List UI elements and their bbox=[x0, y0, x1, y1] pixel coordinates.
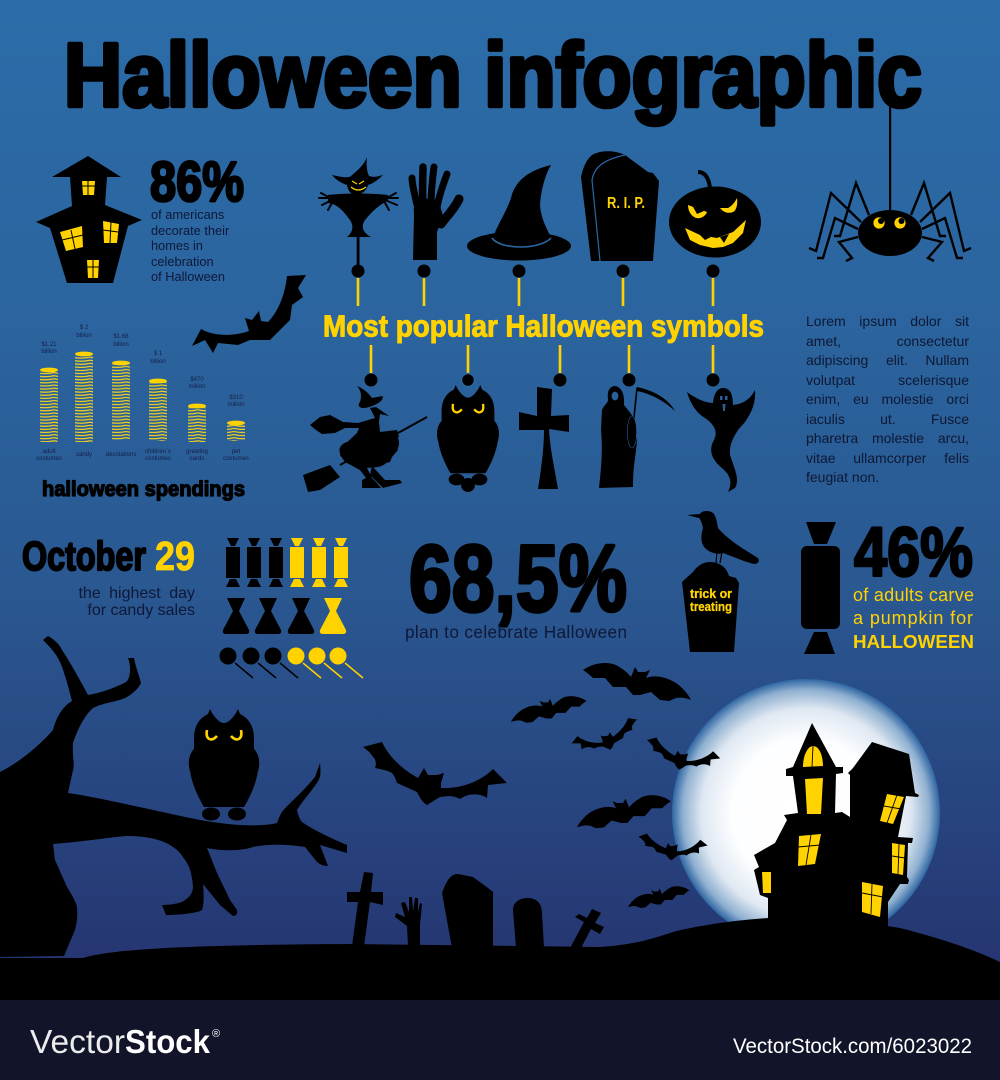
coin stack: greeting cards: cards bbox=[190, 456, 204, 462]
footer logo: Vector bbox=[30, 1023, 125, 1060]
icon: tombstone small bbox=[513, 898, 544, 948]
pictogram: candy bags bbox=[223, 598, 346, 634]
icon: zombie hand small bbox=[395, 897, 422, 946]
coin stack: adult costumes: $1.21 bbox=[41, 342, 57, 348]
stat: October 29: October bbox=[22, 533, 146, 579]
coin stack: adult costumes: adult bbox=[42, 449, 56, 455]
coin stack: candy: billion bbox=[76, 333, 92, 339]
tree with branches bbox=[0, 636, 347, 957]
stat: October 29: 29 bbox=[155, 533, 195, 579]
icon: big candy bbox=[801, 522, 840, 654]
graveyard items bbox=[347, 872, 604, 948]
stat description: of Halloween bbox=[151, 269, 225, 284]
coin stack: pet costumes: pet bbox=[232, 449, 241, 455]
text block: lorem ipsum: iaculis ut. Fusce bbox=[806, 410, 969, 426]
icon: leaning cross bbox=[347, 872, 383, 946]
icon: perched owl bbox=[189, 709, 259, 820]
stat: 46 percent bbox=[853, 513, 974, 652]
coin stack: children's costumes bbox=[145, 351, 171, 462]
stat description: decorate their bbox=[151, 223, 230, 238]
pictogram: lollipops bbox=[220, 648, 363, 678]
coin stack: children's costumes: costumes bbox=[145, 456, 171, 462]
coin stack: pet costumes: million bbox=[227, 402, 245, 408]
text block: lorem ipsum: adipiscing elit. Nullam bbox=[806, 352, 969, 368]
text block: lorem ipsum: volutpat scelerisque bbox=[806, 372, 969, 388]
icon: small haunted house bbox=[36, 156, 142, 283]
icon: owl bbox=[437, 374, 499, 492]
icon: tombstone large bbox=[442, 874, 493, 948]
text block: lorem ipsum: pharetra molestie arcu, bbox=[806, 430, 969, 446]
coin stack: decorations bbox=[106, 334, 136, 458]
text block: lorem ipsum bbox=[806, 313, 969, 485]
coin stack: greeting cards: greeting bbox=[186, 449, 208, 455]
icon: tilted cross bbox=[570, 909, 604, 948]
icon: zombie hand bbox=[412, 167, 459, 260]
coin stack: candy: candy bbox=[76, 452, 92, 458]
stat description: for candy sales bbox=[87, 602, 195, 619]
icon: cross bbox=[519, 387, 569, 489]
coin stack: decorations: billion bbox=[113, 342, 129, 348]
symbols heading: Most popular Halloween symbols bbox=[323, 308, 764, 344]
coin stack: decorations: decotations bbox=[106, 452, 136, 458]
ground hill bbox=[0, 918, 1000, 1000]
stat description: a pumpkin for bbox=[853, 608, 973, 628]
coin stack: adult costumes: billion bbox=[41, 349, 57, 355]
footer bar bbox=[0, 1000, 1000, 1080]
footer logo bbox=[30, 1023, 220, 1060]
icon: flying witch bbox=[303, 386, 427, 492]
coin stack: greeting cards: million bbox=[188, 384, 206, 390]
stat description: the highest day bbox=[78, 585, 195, 602]
connectors: bottom row bbox=[364, 345, 720, 386]
connectors: top row bbox=[352, 264, 720, 306]
icon: crow on trick or treating gravestone: trick or bbox=[690, 586, 732, 601]
stat description: plan to celebrate Halloween bbox=[405, 622, 627, 642]
chart heading: halloween spendings: halloween spendings bbox=[42, 478, 245, 501]
coin stack: greeting cards bbox=[186, 377, 208, 462]
highlight word: HALLOWEEN bbox=[853, 632, 974, 652]
moon bbox=[672, 679, 940, 947]
coin stack: pet costumes bbox=[223, 395, 249, 462]
stat: 68,5 percent: 68,5% bbox=[409, 526, 627, 632]
footer image id: VectorStock.com/6023022 bbox=[733, 1035, 972, 1058]
coin stack: candy: $ 2 bbox=[80, 325, 89, 331]
footer logo: Stock bbox=[125, 1023, 211, 1060]
stat: 46 percent: 46% bbox=[854, 513, 973, 591]
icon: crow on trick or treating gravestone: treating bbox=[690, 599, 732, 614]
icon: witch hat bbox=[467, 165, 571, 260]
stat: 86 percent bbox=[150, 150, 244, 284]
stat description: of americans bbox=[151, 207, 224, 222]
icon: spider bbox=[809, 105, 971, 261]
coin stack: adult costumes bbox=[36, 342, 62, 462]
icon: jack-o-lantern bbox=[669, 172, 761, 258]
text block: lorem ipsum: amet, consectetur bbox=[806, 332, 969, 348]
text block: lorem ipsum: vitae ullamcorper felis bbox=[806, 450, 969, 466]
footer logo: ® bbox=[212, 1028, 220, 1040]
coin stack: greeting cards: $470 bbox=[190, 377, 204, 383]
pictogram: wrapped candies bbox=[226, 538, 348, 587]
stat description: celebration bbox=[151, 254, 214, 269]
haunted house on hill bbox=[754, 723, 919, 930]
coin stack: pet costumes: $310 bbox=[229, 395, 243, 401]
stat description: of adults carve bbox=[853, 585, 974, 605]
icon: crow on trick or treating gravestone bbox=[682, 511, 759, 652]
coin stack: decorations: $1.68 bbox=[113, 334, 129, 340]
coin stack: adult costumes: costumes bbox=[36, 456, 62, 462]
text block: lorem ipsum: Lorem ipsum dolor sit bbox=[806, 313, 969, 329]
title: Halloween infographic bbox=[64, 26, 922, 126]
stat description: homes in bbox=[151, 238, 203, 253]
icon: grim reaper bbox=[599, 386, 675, 488]
stat: October 29 bbox=[22, 533, 195, 619]
icon: flying bat bbox=[192, 275, 306, 353]
coin stack: pet costumes: costumes bbox=[223, 456, 249, 462]
icon: R.I.P. gravestone: R. I. P. bbox=[607, 195, 645, 212]
text block: lorem ipsum: feugiat non. bbox=[806, 469, 879, 485]
bat flock bbox=[363, 663, 720, 908]
chart: halloween spendings coin stacks bbox=[36, 325, 249, 462]
text block: lorem ipsum: enim, eu molestie orci bbox=[806, 391, 969, 407]
icon: ghost bbox=[687, 388, 755, 492]
coin stack: children's costumes: children`s bbox=[145, 449, 171, 455]
coin stack: candy bbox=[75, 325, 93, 458]
stat: 86 percent: 86% bbox=[150, 150, 244, 214]
coin stack: children's costumes: $ 1 bbox=[154, 351, 163, 357]
coin stack: children's costumes: billion bbox=[150, 359, 166, 365]
icon: R.I.P. gravestone bbox=[581, 151, 659, 261]
icon: scarecrow bbox=[319, 157, 398, 267]
